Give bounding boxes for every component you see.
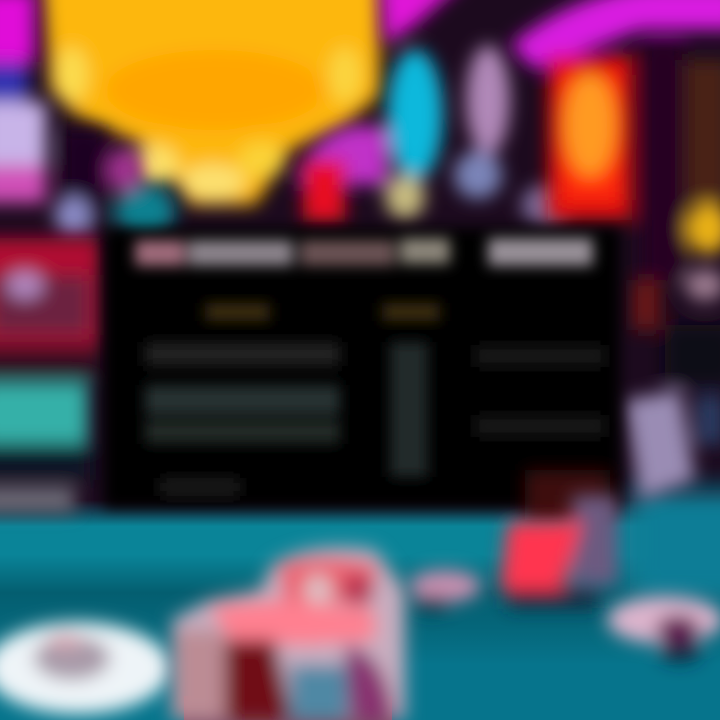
white chip (0, 622, 170, 714)
left red sign and teal panel (0, 238, 100, 512)
small chip centre (409, 570, 481, 612)
right red sign (510, 0, 720, 500)
chip stack (172, 547, 405, 720)
yellow lantern (42, 0, 380, 205)
teal table right highlight (630, 490, 720, 600)
central dark panel (104, 228, 620, 508)
red chip upright (500, 495, 618, 608)
left column signs (0, 0, 175, 240)
centre signs (298, 0, 569, 225)
heading (135, 238, 593, 266)
table rows (145, 342, 605, 496)
dark red stack behind chip (525, 470, 610, 520)
column headings (205, 303, 440, 321)
teal table (0, 500, 720, 720)
panel background (104, 228, 620, 508)
chip stack base (184, 696, 392, 720)
right chip (607, 596, 720, 662)
